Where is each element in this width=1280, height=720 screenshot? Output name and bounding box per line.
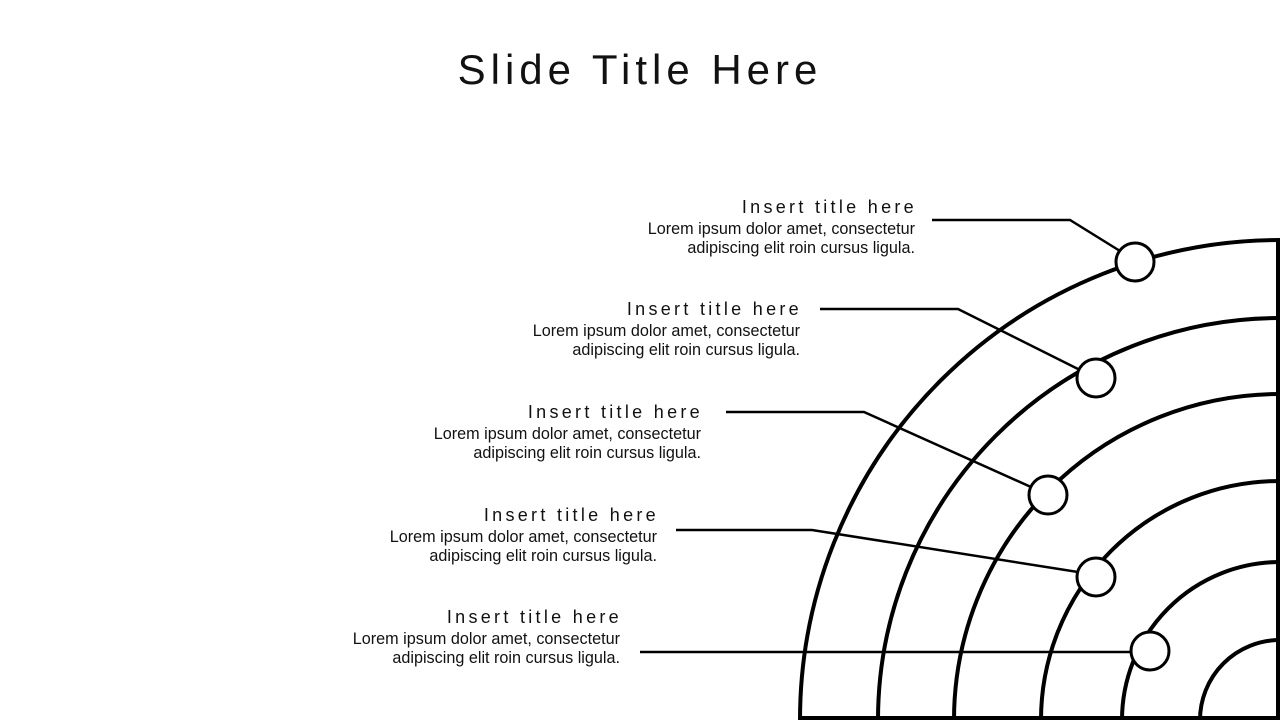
text block 2: adipiscing elit roin cursus ligula. xyxy=(572,341,800,359)
text block 2 xyxy=(533,299,802,359)
text block 4: adipiscing elit roin cursus ligula. xyxy=(429,547,657,565)
text block 1: Lorem ipsum dolor amet, consectetur xyxy=(648,220,915,238)
text block 3: adipiscing elit roin cursus ligula. xyxy=(473,444,701,462)
title: Slide Title Here xyxy=(458,46,822,93)
text block 5: adipiscing elit roin cursus ligula. xyxy=(392,649,620,667)
text block 3: Lorem ipsum dolor amet, consectetur xyxy=(434,425,701,443)
text block 2: Insert title here xyxy=(627,299,802,319)
text block 1 xyxy=(648,197,917,257)
text block 1: Insert title here xyxy=(742,197,917,217)
text block 5: Insert title here xyxy=(447,607,622,627)
text block 3 xyxy=(434,402,703,462)
text block 4: Insert title here xyxy=(484,505,659,525)
text block 3: Insert title here xyxy=(528,402,703,422)
text block 5 xyxy=(353,607,622,667)
text block 4: Lorem ipsum dolor amet, consectetur xyxy=(390,528,657,546)
text block 1: adipiscing elit roin cursus ligula. xyxy=(687,239,915,257)
text block 5: Lorem ipsum dolor amet, consectetur xyxy=(353,630,620,648)
text block 2: Lorem ipsum dolor amet, consectetur xyxy=(533,322,800,340)
text block 4 xyxy=(390,505,659,565)
